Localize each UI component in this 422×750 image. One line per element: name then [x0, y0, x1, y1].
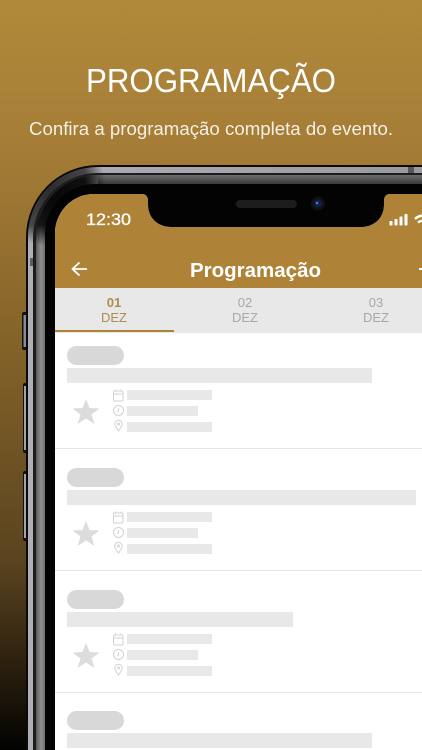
tab: 02 DEZ: DEZ [232, 310, 258, 325]
tab: 03 DEZ: 03 [369, 295, 383, 310]
active tab underline [55, 330, 174, 332]
app header [55, 194, 422, 288]
tab: 02 DEZ: 02 [238, 295, 252, 310]
icon: wifi [415, 216, 422, 222]
title: PROGRAMAÇÃO [86, 62, 336, 99]
header title: Programação [190, 260, 321, 282]
phone notch details [236, 196, 325, 210]
tab: 01 DEZ: DEZ [101, 310, 127, 325]
tab: 03 DEZ: DEZ [363, 310, 389, 325]
tab: 01 DEZ: 01 [107, 295, 121, 310]
event row 4 [67, 711, 372, 748]
phone side buttons [22, 312, 28, 541]
status time: 12:30 [86, 210, 131, 229]
tab: 02 DEZ [233, 298, 258, 322]
event row 2 [55, 468, 422, 571]
icon: back arrow [72, 262, 87, 276]
event row 3 [55, 590, 422, 693]
date tabs [55, 288, 422, 333]
event row 1 [55, 346, 422, 449]
subtitle: Confira a programação completa do evento. [29, 119, 393, 139]
phone body [26, 165, 422, 750]
app screen [55, 194, 422, 750]
tab: 01 DEZ [102, 298, 127, 322]
icon: signal bars [390, 214, 408, 226]
tab: 03 DEZ [364, 298, 388, 322]
icon: clipped header action [419, 268, 422, 270]
